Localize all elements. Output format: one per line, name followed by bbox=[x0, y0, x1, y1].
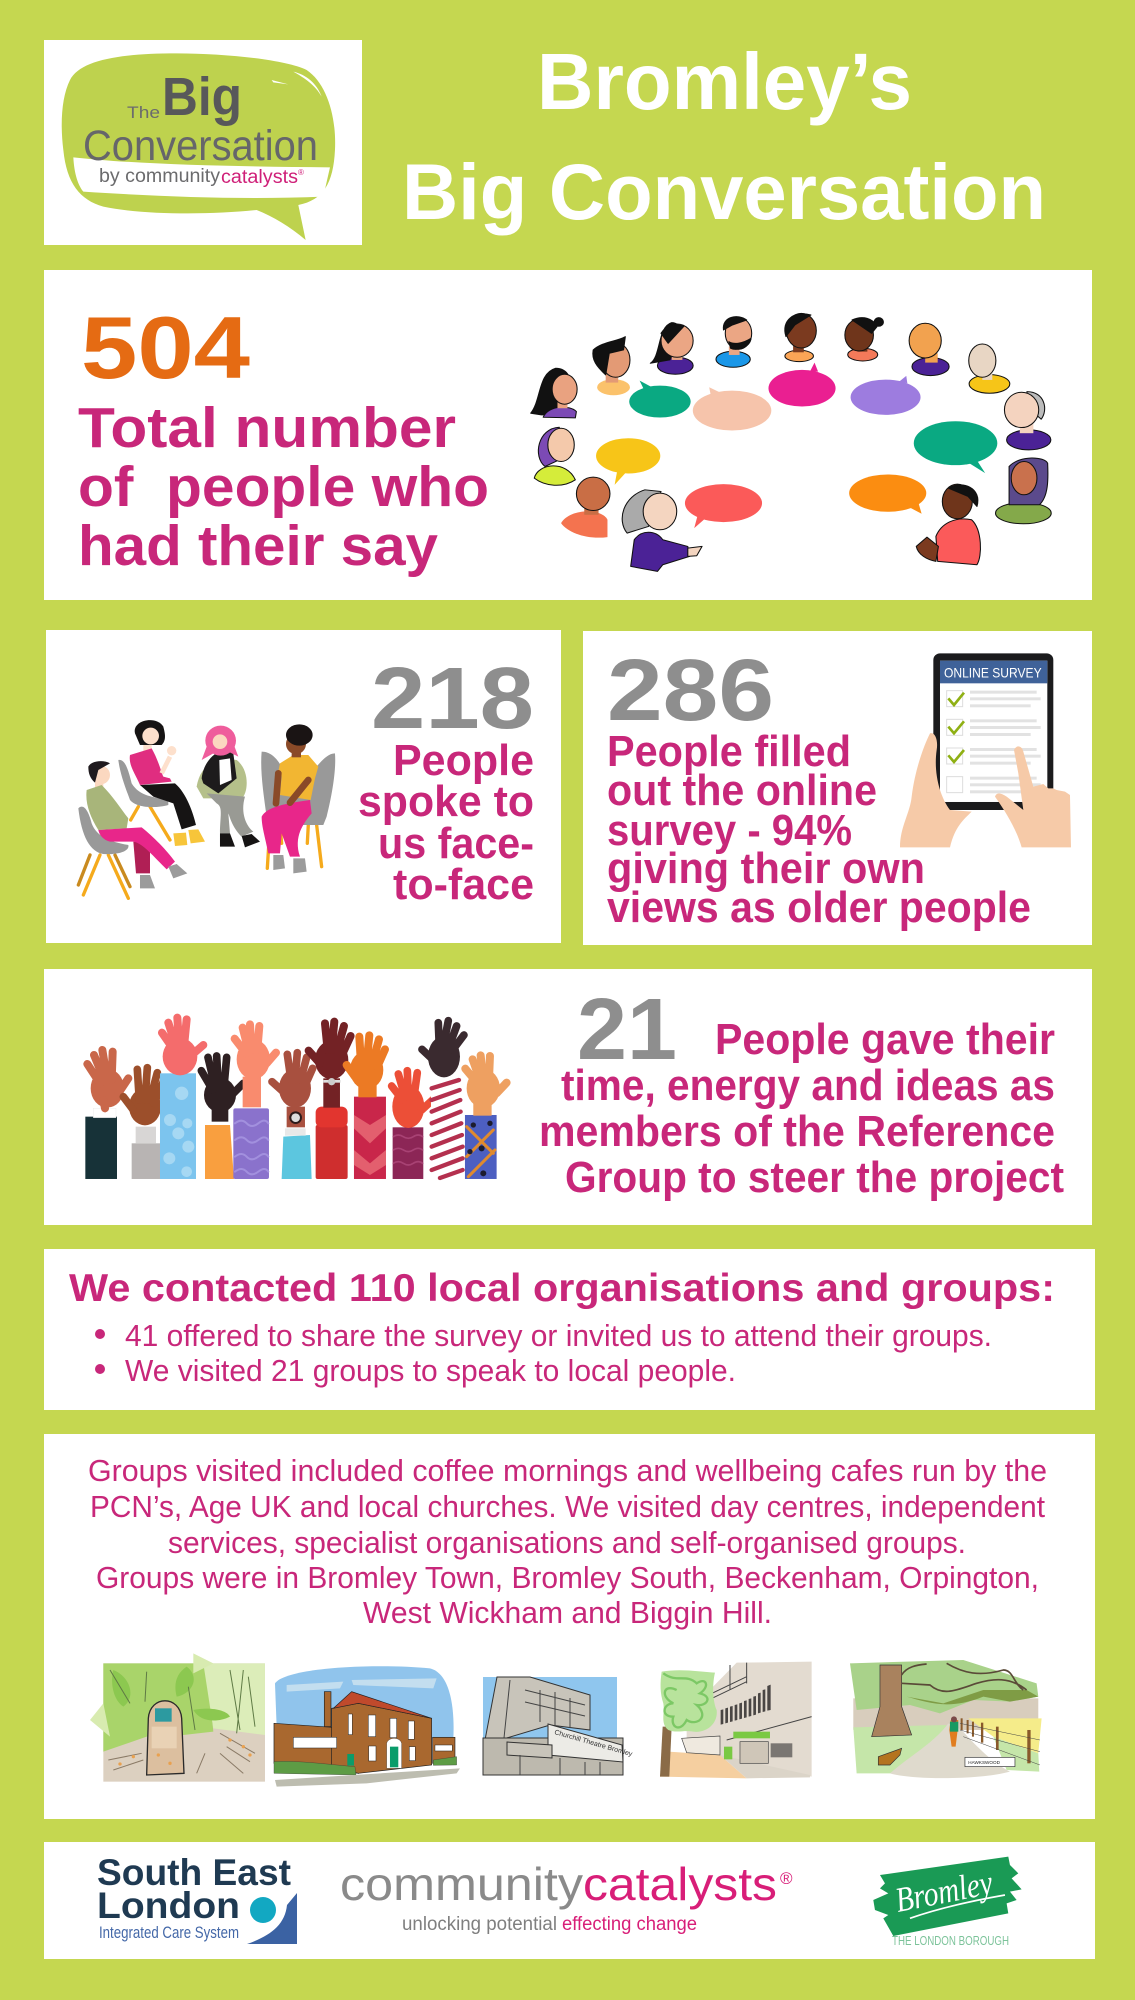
person 14 bbox=[561, 477, 610, 538]
text: groups visited: PCN’s, Age UK and local churches. We visited day centres, independent bbox=[90, 1489, 1045, 1524]
text: groups visited: services, specialist organisations and self-organised groups. bbox=[168, 1525, 966, 1560]
logo: Bromley the London Borough: Bromley bbox=[892, 1863, 996, 1920]
text: people gave their time: People gave their bbox=[715, 1015, 1055, 1064]
illustration: Churchill Theatre bbox=[483, 1677, 634, 1775]
logo: community catalysts: unlocking potential bbox=[402, 1914, 557, 1935]
illustration: woodland path with tree and bench bbox=[850, 1660, 1042, 1778]
logo: South East London Integrated Care System: South East bbox=[97, 1852, 291, 1893]
text: people spoke to us face-to-face bbox=[358, 736, 534, 909]
logo: South East London Integrated Care System: Integrated Care System bbox=[99, 1923, 239, 1942]
text: people filled out the online survey: views as older people bbox=[607, 883, 1031, 932]
text: people spoke to us face-to-face: People bbox=[393, 736, 534, 785]
panel: Big Conversation logo: Conversation bbox=[83, 122, 318, 170]
text: total number of people who had their say: Total number bbox=[78, 396, 456, 460]
bullet list bbox=[95, 1318, 992, 1388]
text: people gave their time: members of the Reference bbox=[539, 1107, 1055, 1156]
illustration: raised hands bbox=[85, 1018, 507, 1179]
panel: online survey bbox=[583, 631, 1092, 945]
panel: partner logos bbox=[44, 1842, 1095, 1959]
icon: tablet with online survey: ONLINE SURVEY bbox=[944, 666, 1042, 681]
heading: we contacted 110 local organisations: We contacted 110 local organisations and groups: bbox=[69, 1267, 1055, 1310]
illustration: shopping street with library bbox=[660, 1662, 812, 1778]
text: people filled out the online survey: out the online bbox=[607, 766, 877, 815]
illustration: circle of people with speech bubbles bbox=[531, 313, 1051, 571]
text: total number of people who had their say bbox=[78, 396, 489, 578]
panel: Big Conversation logo bbox=[44, 40, 362, 245]
person 13 bbox=[534, 427, 575, 485]
person 6 bbox=[845, 318, 883, 361]
logo: community catalysts: community bbox=[340, 1858, 583, 1910]
text: people filled out the online survey: giving their own bbox=[607, 844, 925, 893]
panel: Big Conversation logo: catalysts bbox=[221, 167, 298, 188]
illustration: woodland marker stone bbox=[90, 1653, 265, 1782]
bullet list: We visited 21 groups to speak to local people. bbox=[125, 1353, 736, 1388]
illustration: four people sitting in chairs bbox=[78, 720, 335, 898]
panel: face-to-face bbox=[46, 630, 561, 943]
panel: Big Conversation logo: The bbox=[127, 103, 160, 122]
number: 21: 21 bbox=[577, 981, 677, 1078]
text: groups visited bbox=[88, 1453, 1047, 1630]
number: 504: 504 bbox=[81, 298, 250, 397]
illustration: brick building bbox=[274, 1666, 460, 1787]
person 2 bbox=[593, 337, 630, 395]
logo: South East London Integrated Care System: London bbox=[97, 1885, 240, 1926]
person 11 bbox=[916, 484, 980, 565]
person 3 bbox=[650, 323, 693, 374]
panel: Big Conversation logo: by community bbox=[99, 166, 221, 187]
text: people spoke to us face-to-face: to-face bbox=[393, 860, 534, 909]
text: people spoke to us face-to-face: spoke to bbox=[358, 777, 534, 826]
text: groups visited: Groups visited included coffee mornings and wellbeing cafes run by the bbox=[88, 1453, 1047, 1488]
text: people gave their time bbox=[539, 1015, 1064, 1202]
person 4 bbox=[716, 317, 752, 367]
logo: South East London Integrated Care System bbox=[97, 1852, 297, 1944]
person 1 bbox=[531, 368, 577, 418]
text: groups visited: West Wickham and Biggin Hill. bbox=[363, 1595, 772, 1630]
person 8 bbox=[969, 344, 1010, 393]
person 5 bbox=[785, 313, 816, 362]
panel: Big Conversation logo: ® bbox=[298, 168, 304, 177]
logo: community catalysts bbox=[340, 1858, 793, 1935]
text: groups visited: Groups were in Bromley Town, Bromley South, Beckenham, Orpington, bbox=[96, 1560, 1039, 1595]
bullet list: 41 offered to share the survey or invited us to attend their groups. bbox=[125, 1318, 992, 1353]
text: people filled out the online survey bbox=[607, 727, 1031, 932]
text: people spoke to us face-to-face: us face- bbox=[378, 819, 534, 868]
title: Big Conversation bbox=[402, 147, 1046, 236]
logo: Bromley the London Borough: THE LONDON BOROUGH bbox=[892, 1933, 1009, 1948]
panel: total number of people bbox=[44, 270, 1092, 600]
logo: Bromley the London Borough bbox=[873, 1857, 1022, 1948]
logo: community catalysts: ® bbox=[780, 1869, 793, 1888]
text: people filled out the online survey: People filled bbox=[607, 727, 851, 776]
icon: tablet with online survey bbox=[900, 653, 1071, 847]
number: 286: 286 bbox=[607, 642, 774, 739]
number: 218: 218 bbox=[371, 650, 534, 747]
text: people gave their time: Group to steer the project bbox=[565, 1153, 1064, 1202]
person 10 bbox=[996, 458, 1051, 524]
title bbox=[402, 37, 1046, 236]
illustration: Churchill Theatre: Churchill Theatre Bromley bbox=[553, 1729, 634, 1758]
person 9 bbox=[1004, 392, 1051, 450]
panel: groups visited bbox=[44, 1434, 1095, 1819]
text: total number of people who had their say: of people who bbox=[78, 455, 489, 519]
text: total number of people who had their say: had their say bbox=[78, 514, 438, 578]
panel: reference group bbox=[44, 969, 1092, 1225]
panel: organisations contacted bbox=[44, 1249, 1095, 1410]
panel: Big Conversation logo: Big bbox=[162, 67, 242, 127]
person 15 bbox=[622, 490, 702, 571]
logo: community catalysts: effecting change bbox=[562, 1914, 697, 1935]
logo: community catalysts: catalysts bbox=[583, 1858, 777, 1910]
text: people filled out the online survey: survey - 94% bbox=[607, 806, 852, 855]
text: people gave their time: time, energy and ideas as bbox=[561, 1061, 1055, 1110]
person 7 bbox=[909, 323, 949, 376]
illustration: woodland path with tree and bench: HAWKSWOOD bbox=[968, 1760, 1000, 1766]
title: Bromley’s bbox=[537, 37, 912, 126]
